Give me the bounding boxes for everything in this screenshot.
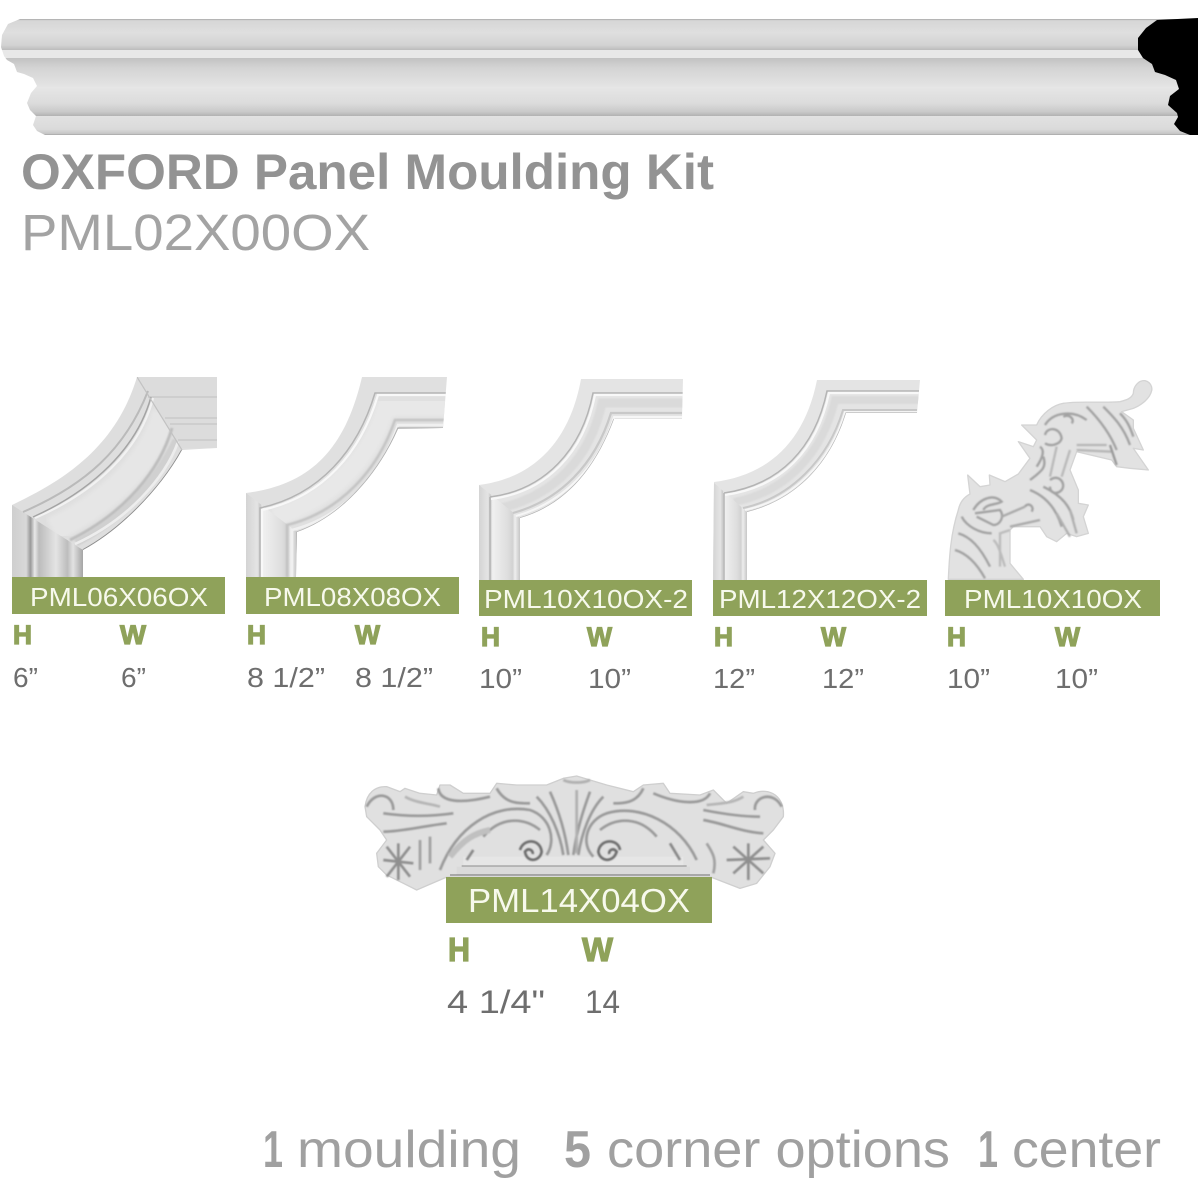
corner 3 height: H (481, 622, 500, 652)
corner 2 height: H (247, 620, 266, 650)
corner 2 height value: 8 1/2” (247, 662, 325, 693)
corner 1 PML06X06OX (12, 377, 225, 688)
corner 5 PML10X10OX ornate (945, 381, 1160, 694)
center piece PML14X04OX: PML14X04OX (468, 882, 690, 919)
center label (446, 877, 712, 923)
center text: center (1012, 1121, 1161, 1179)
title: OXFORD Panel Moulding Kit (21, 144, 714, 200)
corner 2 shape (246, 377, 447, 577)
corner 4 width: W (821, 622, 847, 652)
corner 5 width value: 10” (1055, 663, 1098, 694)
center acanthus ornament (365, 776, 783, 890)
product code: PML02X00OX (21, 204, 370, 261)
corner options label: corner options (607, 1121, 950, 1179)
corner 3 width value: 10” (588, 663, 631, 694)
corner 1 width value: 6” (121, 662, 146, 693)
center height value: 4 1/4" (447, 984, 545, 1020)
kit contents summary (263, 1121, 1161, 1179)
corner 2 width value: 8 1/2” (355, 662, 433, 693)
corner 5 height: H (947, 622, 966, 652)
corner 5 acanthus ornament (948, 381, 1152, 579)
corner 4 width value: 12” (822, 663, 864, 694)
corner 2 label (246, 577, 459, 614)
corner 5 height value: 10” (947, 663, 990, 694)
corner 2 PML08X08OX (240, 370, 459, 693)
corner 4 height value: 12” (713, 663, 755, 694)
moulding strip (0, 18, 1200, 135)
corner 1 height value: 6” (13, 662, 38, 693)
corner 3 shape (479, 379, 683, 580)
corner 2 width: W (355, 620, 381, 650)
corner 3 PML10X10OX-2: PML10X10OX-2 (484, 584, 688, 614)
center width: W (582, 931, 614, 968)
moulding label: moulding (297, 1121, 521, 1179)
center height: H (448, 931, 470, 968)
corner 2 PML08X08OX: PML08X08OX (264, 582, 441, 612)
corner 1 label (12, 577, 225, 614)
corner 3 height value: 10” (479, 663, 522, 694)
moulding black end profile (1138, 18, 1198, 135)
corner 4 label (713, 580, 927, 616)
center width value: 14 (585, 984, 620, 1020)
corner 1 width: W (120, 620, 147, 650)
center piece PML14X04OX (365, 776, 783, 1020)
corner 4 shape (713, 380, 920, 580)
corner 5 PML10X10OX ornate: PML10X10OX (964, 584, 1142, 614)
corner 3 width: W (587, 622, 613, 652)
corner 3 PML10X10OX-2 (470, 370, 692, 694)
corner 5 label (945, 580, 1160, 616)
corner 3 label (479, 580, 692, 616)
count: moulding: 1 (263, 1121, 283, 1179)
count: center: 1 (978, 1121, 998, 1179)
corner 4 height: H (714, 622, 733, 652)
corner 1 shape (12, 377, 217, 577)
corner 4 PML12X12OX-2 (705, 370, 927, 694)
corner 1 PML06X06OX: PML06X06OX (30, 582, 208, 612)
corner 5 width: W (1055, 622, 1081, 652)
corner 4 PML12X12OX-2: PML12X12OX-2 (719, 584, 921, 614)
corner 1 height: H (13, 620, 32, 650)
count: corner options: 5 (564, 1121, 591, 1179)
moulding body bands (0, 19, 1200, 135)
